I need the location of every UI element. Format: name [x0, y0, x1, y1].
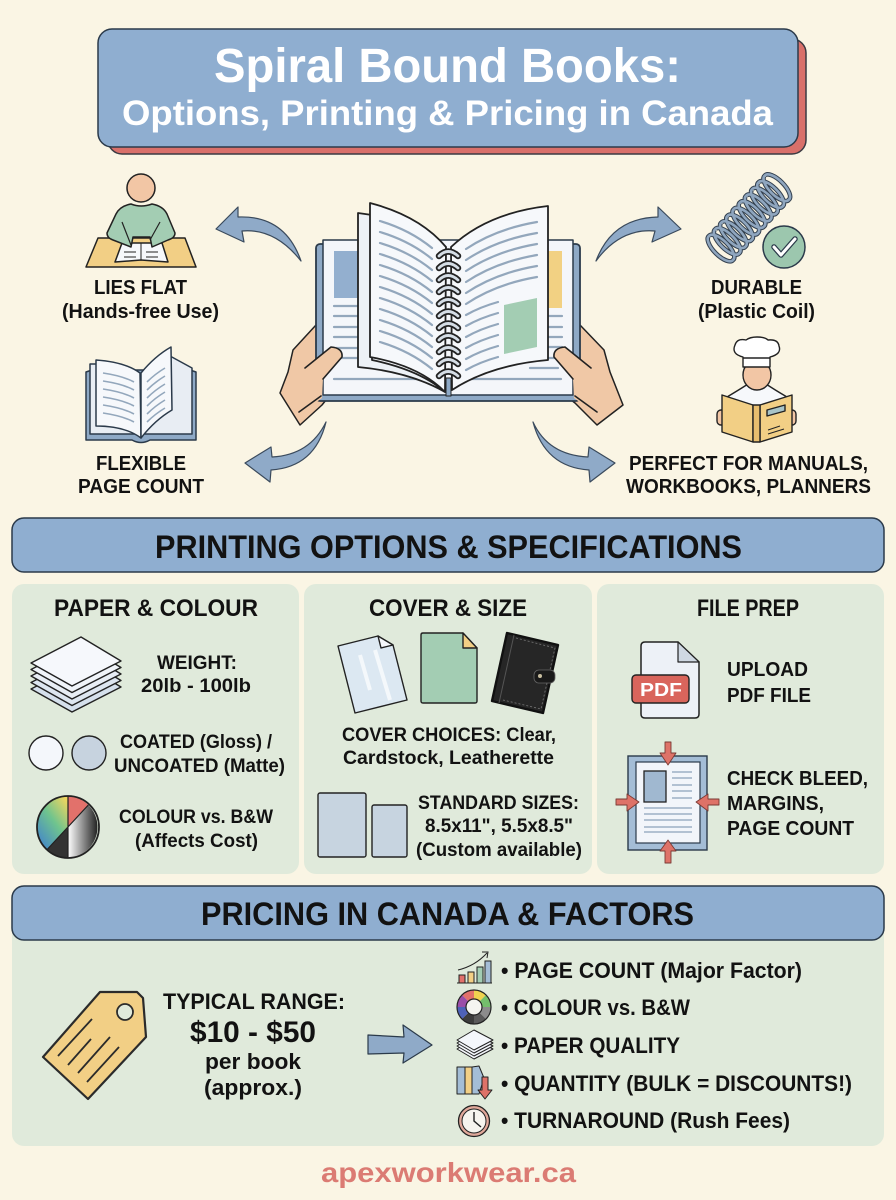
- heading: paper and colour: PAPER & COLOUR: [54, 595, 258, 622]
- text: coated: UNCOATED (Matte): [114, 756, 285, 777]
- heading: cover and size: COVER & SIZE: [369, 595, 527, 622]
- icon: coated and uncoated swatches: [29, 736, 106, 770]
- text: check bleed: [727, 768, 868, 840]
- arrow: to manuals: [533, 422, 615, 482]
- text: check bleed: CHECK BLEED,: [727, 768, 868, 790]
- text: upload pdf: UPLOAD: [727, 659, 808, 681]
- text: coated: [114, 732, 285, 777]
- heading: file prep: FILE PREP: [697, 595, 799, 622]
- text: standard sizes: STANDARD SIZES:: [418, 793, 579, 814]
- label: durable: [698, 277, 815, 323]
- text: typical range: [163, 989, 345, 1100]
- text: cover choices: [342, 725, 556, 769]
- label: lies flat: [62, 277, 219, 323]
- text: typical range: $10 - $50: [190, 1016, 316, 1049]
- label: lies flat: LIES FLAT: [94, 277, 187, 299]
- icon: person reading at desk: [86, 174, 196, 267]
- text: colour cost: COLOUR vs. B&W: [119, 807, 273, 828]
- label: durable: (Plastic Coil): [698, 301, 815, 323]
- text: cover choices: COVER CHOICES: Clear,: [342, 725, 556, 746]
- text: quantity factor: • QUANTITY (BULK = DISCOUNTS!): [501, 1071, 852, 1096]
- label: perfect for manuals: [626, 453, 871, 498]
- icon: bleed and margins diagram: [616, 742, 719, 863]
- text: typical range: per book: [205, 1049, 302, 1074]
- icon: paper stack: [31, 637, 121, 712]
- text: standard sizes: (Custom available): [416, 840, 582, 861]
- icon: colour versus black and white wheel: [36, 796, 99, 858]
- text: check bleed: PAGE COUNT: [727, 818, 854, 840]
- icon: stack of books with down arrow: [457, 1066, 492, 1099]
- heading: pricing in canada: PRICING IN CANADA & FACTORS: [201, 896, 694, 932]
- label: flexible page count: [78, 453, 204, 498]
- arrow: range to factors: [368, 1025, 432, 1063]
- central spiral bound book held by hands: [280, 203, 623, 425]
- icon: plastic coil with check badge: [708, 174, 805, 268]
- label: flexible page count: PAGE COUNT: [78, 476, 204, 498]
- text: colour cost: [119, 807, 273, 852]
- label: flexible page count: FLEXIBLE: [96, 453, 186, 475]
- heading: printing options: [12, 518, 884, 572]
- text: upload pdf: [727, 659, 811, 707]
- arrow: to durable: [596, 207, 681, 261]
- title banner: Spiral Bound Books:: [214, 40, 681, 93]
- text: typical range: (approx.): [204, 1075, 302, 1100]
- icon: pdf file: [632, 642, 699, 718]
- text: paper quality factor: • PAPER QUALITY: [501, 1033, 680, 1058]
- text: standard sizes: 8.5x11", 5.5x8.5": [425, 816, 573, 837]
- title banner: Options, Printing & Pricing in Canada: [122, 94, 774, 133]
- arrow: to flexible page count: [245, 422, 326, 482]
- icon: page sizes: [318, 793, 407, 857]
- icon: price tag: [43, 992, 146, 1099]
- label: perfect for manuals: WORKBOOKS, PLANNERS: [626, 476, 871, 498]
- label: lies flat: (Hands-free Use): [62, 301, 219, 323]
- footer url: apexworkwear.ca: [321, 1157, 576, 1188]
- label: perfect for manuals: PERFECT FOR MANUALS,: [629, 453, 868, 475]
- icon: bar chart growth: [457, 952, 492, 983]
- text: cover choices: Cardstock, Leatherette: [343, 748, 554, 769]
- title banner: [98, 29, 806, 154]
- text: standard sizes: [416, 793, 582, 861]
- text: upload pdf: PDF FILE: [727, 685, 811, 707]
- panel: file prep: [597, 584, 884, 874]
- panel: cover and size: [304, 584, 592, 874]
- icon: paper quality stack: [457, 1030, 493, 1059]
- text: page count factor: • PAGE COUNT (Major Factor): [501, 958, 802, 983]
- text: typical range: TYPICAL RANGE:: [163, 989, 345, 1014]
- icon: clear cover: [338, 636, 407, 713]
- heading: pricing in canada: [12, 886, 884, 940]
- text: weight: 20lb - 100lb: [141, 676, 251, 697]
- icon: open book with many pages: [86, 347, 196, 442]
- icon: clock: [458, 1106, 490, 1136]
- icon: pdf file: PDF: [640, 680, 682, 700]
- text: weight: WEIGHT:: [157, 653, 237, 674]
- panel: pricing: [12, 886, 884, 1146]
- text: check bleed: MARGINS,: [727, 793, 824, 815]
- icon: chef reading manual: [717, 337, 796, 442]
- icon: colour ring: [457, 990, 491, 1024]
- icon: cardstock cover: [421, 633, 477, 703]
- text: turnaround factor: • TURNAROUND (Rush Fees): [501, 1108, 790, 1133]
- icon: leatherette cover: [492, 633, 558, 713]
- label: durable: DURABLE: [711, 277, 802, 299]
- text: weight: [141, 653, 251, 697]
- arrow: to lies flat: [216, 207, 301, 261]
- panel: paper and colour: [12, 584, 299, 874]
- text: coated: COATED (Gloss) /: [120, 732, 273, 753]
- text: colour factor: • COLOUR vs. B&W: [501, 995, 690, 1020]
- heading: printing options: PRINTING OPTIONS & SPECIFICATIONS: [155, 529, 742, 565]
- text: colour cost: (Affects Cost): [135, 831, 258, 852]
